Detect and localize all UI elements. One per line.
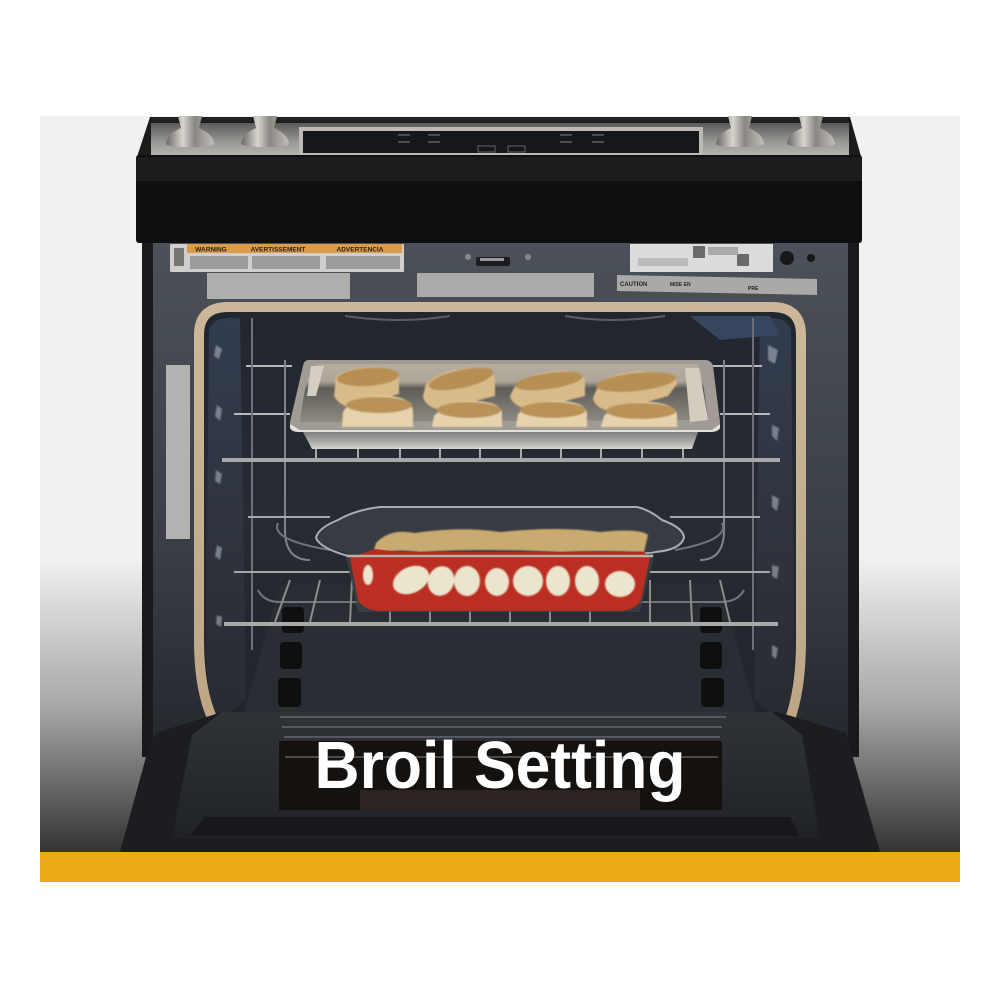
gold bar [40, 852, 960, 882]
oven side strips [142, 243, 156, 757]
caution label [617, 275, 817, 295]
cheese topping [372, 529, 648, 556]
black band [136, 155, 862, 243]
bottom rack [224, 517, 778, 624]
top rack [222, 318, 780, 650]
door hinge ledge [120, 712, 880, 852]
broil element [345, 316, 665, 320]
oven cooktop edge [136, 117, 862, 240]
glass body [316, 507, 684, 612]
glass baking dish [316, 507, 684, 612]
front row bread [342, 396, 677, 427]
warning label: AVERTISSEMENT [251, 246, 305, 254]
back row bread [334, 367, 677, 412]
oven cavity [204, 312, 796, 722]
title: Broil Setting [314, 728, 686, 803]
gasket [199, 307, 801, 722]
door window [279, 741, 722, 810]
front lip [347, 555, 653, 557]
icon: oven range [120, 116, 880, 852]
baking sheet [290, 360, 720, 449]
caution label: MISE EN [670, 282, 691, 288]
sauce [350, 558, 650, 611]
photo background [40, 116, 960, 852]
oven knobs [166, 116, 835, 147]
door liner [172, 712, 820, 838]
warning label: ADVERTENCIA [337, 246, 384, 254]
door ridges [280, 717, 726, 737]
garlic bread slices [334, 363, 677, 427]
pasta shells [363, 560, 635, 600]
oven floor [244, 585, 756, 712]
caution label: PRE [748, 286, 759, 292]
oven door [120, 712, 880, 852]
side walls [206, 316, 794, 722]
spec labels [166, 244, 773, 539]
oven front frame [153, 243, 848, 743]
caution label: CAUTION [620, 282, 647, 288]
door bottom trim [190, 817, 800, 836]
control display [299, 127, 703, 155]
warning label [170, 244, 404, 272]
latch and switch [465, 251, 815, 266]
cavity wall vents [278, 607, 724, 707]
warning label: WARNING [195, 246, 227, 254]
